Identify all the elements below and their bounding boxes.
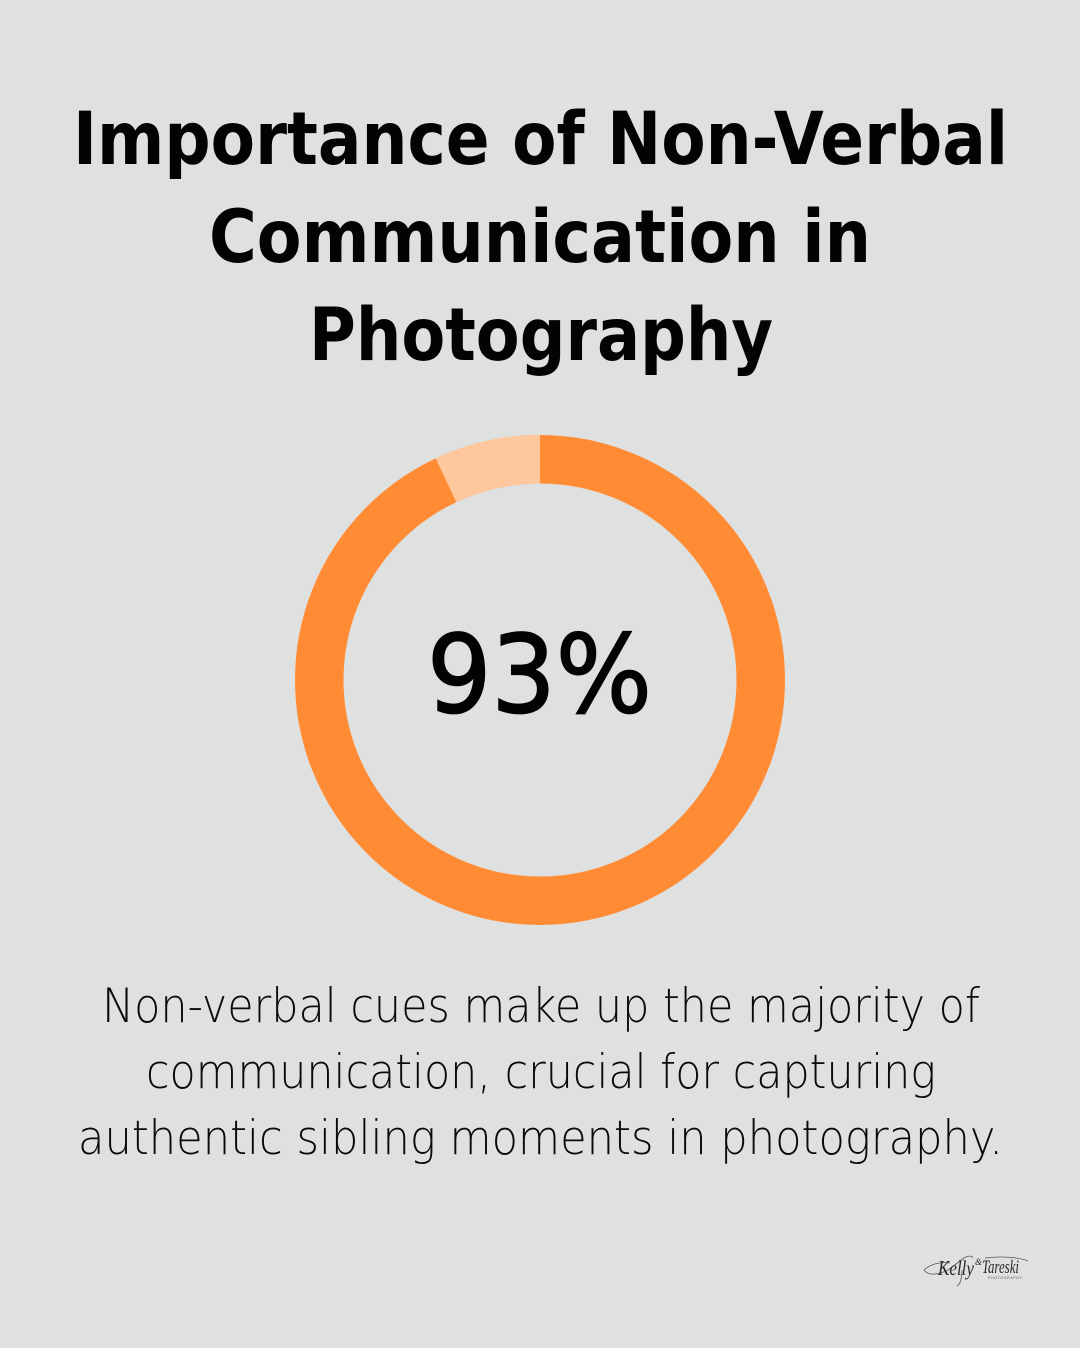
donut percentage value: 93% [427, 613, 652, 738]
logo signature [924, 1256, 1028, 1286]
logo signature: & [975, 1257, 982, 1267]
logo signature: Kelly [937, 1256, 975, 1280]
logo signature: PHOTOGRAPHY [988, 1276, 1023, 1280]
donut chart: 93% [319, 435, 761, 901]
logo signature: Tareski [982, 1257, 1019, 1278]
description text [78, 979, 1003, 1166]
title: Communication in [209, 195, 871, 280]
description text: Non-verbal cues make up the majority of [102, 979, 980, 1034]
title: Photography [309, 293, 773, 378]
description text: authentic sibling moments in photography. [78, 1111, 1003, 1166]
description text: communication, crucial for capturing [146, 1045, 936, 1100]
donut remainder segment: 7% [436, 435, 540, 502]
title [73, 97, 1008, 378]
